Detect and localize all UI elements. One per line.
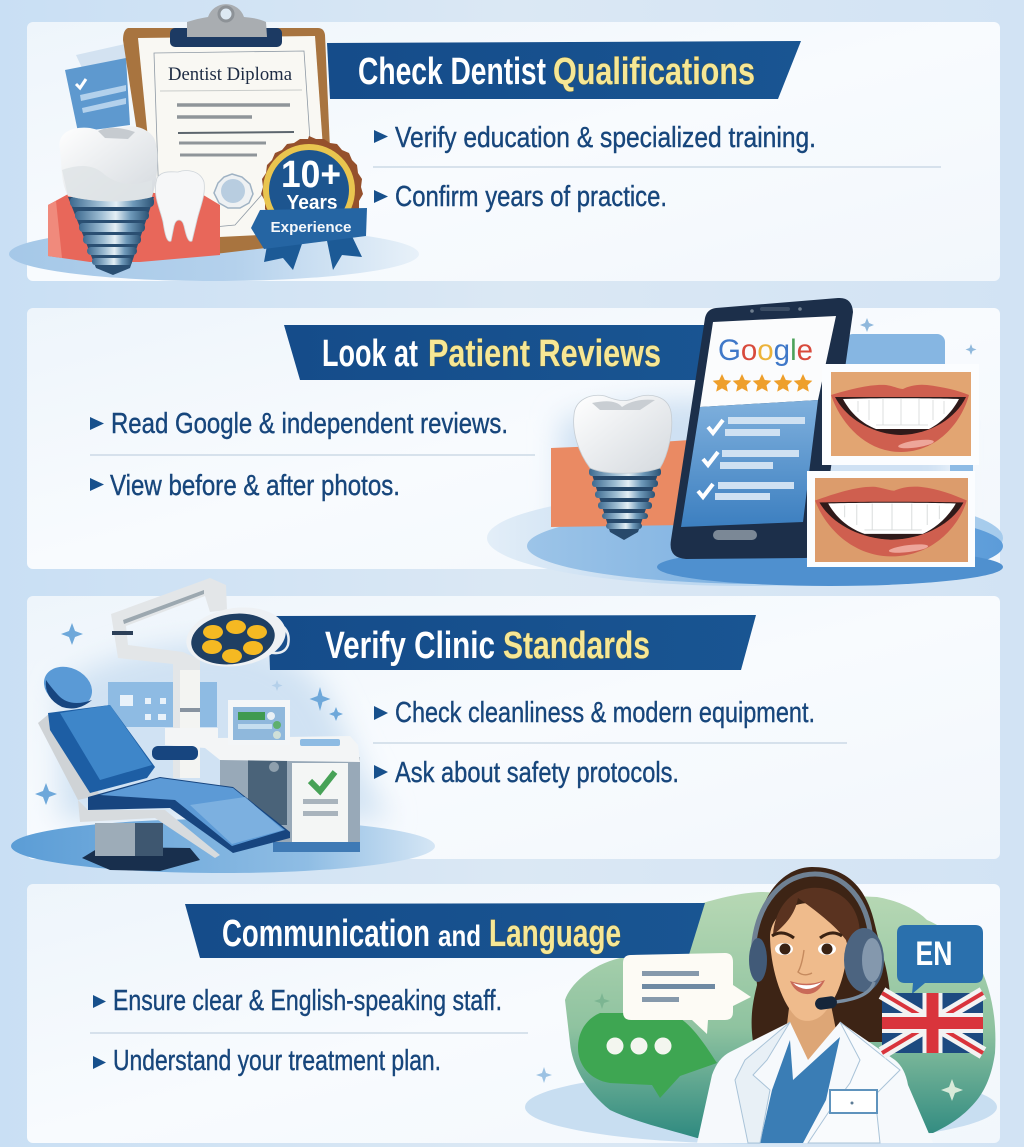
name badge — [830, 1090, 877, 1113]
gum — [551, 440, 690, 527]
sparkles — [860, 318, 976, 355]
heading banner: patient reviews: Look at — [322, 333, 418, 375]
language bubble EN: EN — [916, 935, 952, 973]
seat — [88, 777, 290, 853]
bullet list: Read Google & independent reviews. — [111, 408, 508, 440]
panel 1 card — [27, 22, 1000, 281]
heading banner: clinic standards — [268, 615, 756, 670]
small natural tooth — [155, 171, 204, 241]
eyes — [775, 943, 793, 955]
brows — [772, 933, 842, 938]
checklist rows — [698, 417, 805, 500]
window — [108, 682, 217, 727]
experience badge: Experience — [270, 219, 352, 236]
home button — [713, 530, 757, 540]
language bubble EN — [897, 925, 983, 994]
armrest — [152, 746, 198, 760]
white speech bubble — [623, 953, 751, 1034]
soft hill backdrop — [60, 640, 390, 820]
embossed seal — [214, 174, 253, 208]
illustration: diploma clipboard, implant and badge — [9, 4, 419, 281]
heading banner: communication: Communication — [222, 913, 430, 955]
cabinet base — [273, 842, 360, 852]
neck — [785, 1000, 838, 1062]
experience badge — [251, 136, 367, 270]
google wordmark: Google — [718, 334, 813, 367]
woman — [697, 867, 933, 1143]
bullet list — [373, 697, 847, 789]
panel 3 card — [27, 596, 1000, 859]
implant screw — [68, 197, 154, 275]
heading banner: communication: and — [438, 920, 481, 953]
gum block — [48, 193, 220, 262]
experience badge: Years — [286, 192, 338, 214]
monitor — [228, 700, 290, 745]
panel: look at patient reviews — [27, 298, 1003, 586]
backrest — [48, 705, 155, 793]
chair base — [82, 823, 200, 871]
heading banner: communication — [185, 903, 705, 958]
tooth crown — [574, 395, 672, 473]
heading banner: patient reviews: Patient Reviews — [428, 333, 661, 375]
hair back — [752, 867, 890, 1042]
illustration: phone, tooth and smile photos — [487, 298, 1003, 586]
diploma text lines — [160, 90, 302, 155]
bullet list: Understand your treatment plan. — [113, 1045, 441, 1077]
heading banner: check dentist qualifications — [327, 41, 801, 99]
ground ellipse — [525, 1070, 997, 1144]
heading banner: communication: Language — [489, 913, 621, 955]
headset — [749, 874, 884, 1010]
bullet list — [373, 122, 941, 213]
checklist card — [292, 763, 348, 842]
soft backdrop — [560, 399, 950, 540]
bullet list: Confirm years of practice. — [395, 181, 667, 213]
implant crown — [59, 126, 158, 201]
heading banner: patient reviews — [284, 325, 720, 380]
headrest — [37, 659, 99, 715]
heading banner: clinic standards: Verify Clinic — [325, 625, 495, 667]
background blue panels — [845, 334, 973, 500]
bullet list: View before & after photos. — [110, 470, 400, 502]
dental chair — [37, 659, 290, 871]
dental lamp — [182, 601, 290, 673]
panel 4 card — [27, 884, 1000, 1143]
phone screen blue — [681, 400, 818, 527]
clipboard — [123, 4, 334, 254]
bullet list — [90, 408, 535, 502]
bullet list: Ensure clear & English-speaking staff. — [113, 985, 502, 1017]
face — [770, 888, 860, 1021]
heading banner: clinic standards: Standards — [503, 625, 650, 667]
sparkles — [35, 623, 343, 805]
panel: verify clinic standards — [11, 578, 1000, 873]
panel: communication and language — [27, 867, 1000, 1144]
chair frame — [78, 800, 220, 858]
equipment cabinet — [165, 700, 360, 852]
dental implant — [589, 468, 661, 540]
ground ellipses — [487, 490, 1003, 586]
bullet list: Verify education & specialized training. — [395, 122, 816, 154]
smile photo: upper — [822, 364, 979, 465]
heading banner: check dentist qualifications: Qualifications — [553, 51, 755, 93]
phone screen white — [700, 316, 836, 407]
bullet list: Check cleanliness & modern equipment. — [395, 697, 815, 729]
british flag — [882, 993, 983, 1053]
bullet list — [90, 985, 528, 1077]
heading banner: check dentist qualifications: Check Dentist — [358, 51, 546, 93]
ground ellipse — [9, 227, 419, 281]
scrubs — [760, 1037, 840, 1143]
lab coat — [697, 1022, 933, 1143]
five stars — [713, 374, 812, 392]
smile photo: lower — [807, 471, 975, 567]
illustration: dental chair and equipment — [11, 578, 435, 873]
clip — [170, 4, 282, 47]
panel 2 card — [27, 308, 1000, 569]
illustration: receptionist with speech bubbles and flag — [536, 867, 983, 1143]
smartphone — [671, 298, 853, 559]
green backdrop — [565, 892, 995, 1138]
panel: check dentist qualifications — [9, 4, 1000, 281]
ground ellipse — [11, 819, 435, 873]
green chat bubble — [578, 1013, 717, 1098]
diploma title: Dentist Diploma — [168, 64, 293, 85]
lamp arm — [111, 578, 227, 778]
bullet list: Ask about safety protocols. — [395, 757, 679, 789]
sparkles — [536, 993, 963, 1101]
smile — [790, 980, 825, 994]
blue document behind clipboard — [65, 44, 130, 132]
experience badge: 10+ — [281, 154, 341, 196]
fringe — [773, 888, 860, 947]
nose — [798, 950, 812, 975]
